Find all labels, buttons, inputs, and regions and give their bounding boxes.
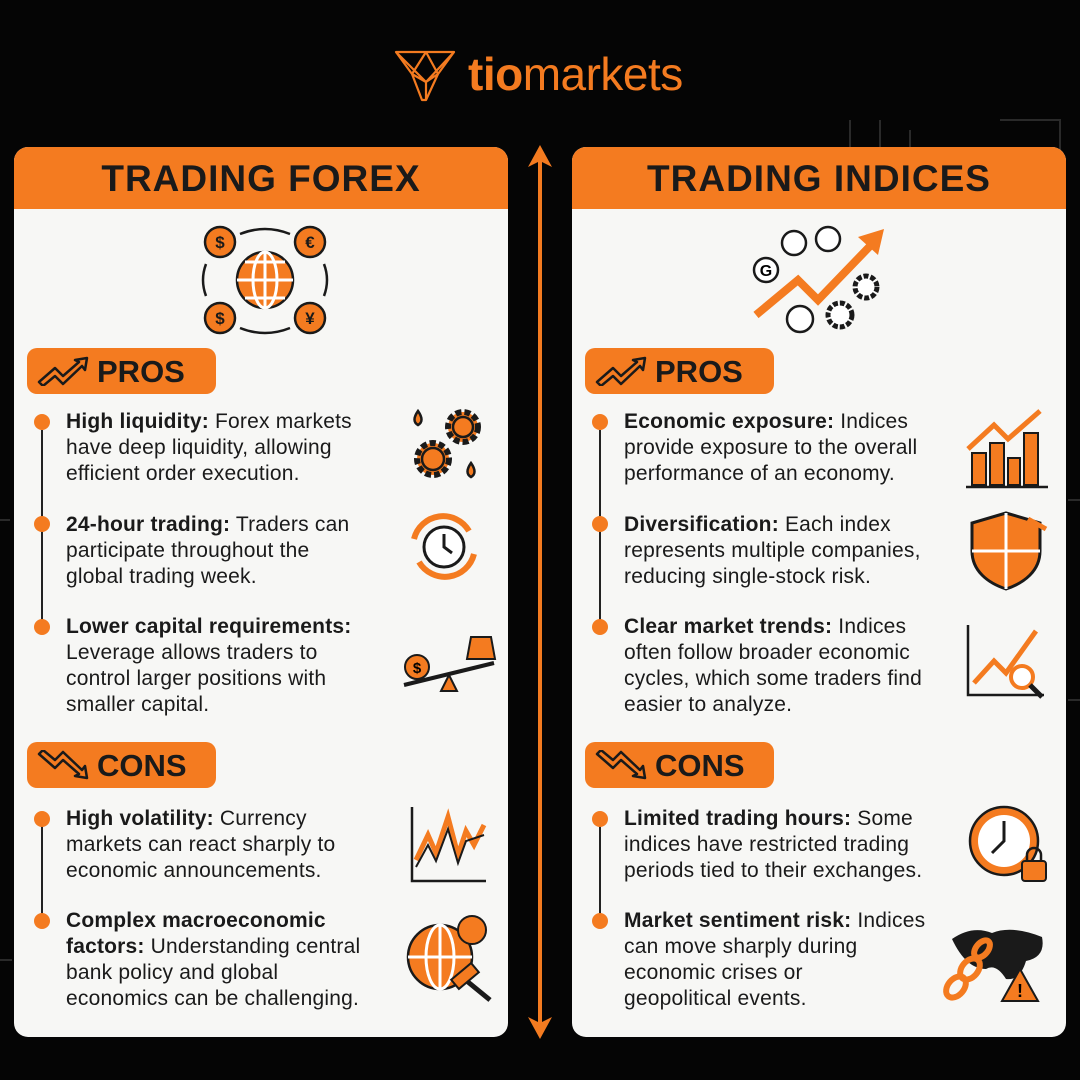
icon: trend magnifier: [966, 625, 1044, 699]
icon: gears and drops: [413, 409, 481, 478]
icon: globe currency: $: [215, 233, 225, 252]
logo: tiomarkets: [468, 48, 683, 100]
pros badge: PROS: [655, 354, 743, 389]
con item: limited trading hours: [624, 807, 922, 882]
con item: high volatility: economic announcements.: [66, 859, 322, 882]
cons badge: CONS: [97, 748, 187, 783]
panel: trading forex: [14, 147, 508, 1037]
icon: clock with lock: [968, 806, 1047, 882]
con item: complex macroeconomic factors: Complex macroeconomic: [66, 909, 326, 932]
icon: trend with company logos: [752, 226, 884, 334]
pro item: 24-hour trading: global trading week.: [66, 565, 257, 588]
icon: globe currency: €: [305, 233, 315, 252]
con item: limited trading hours: indices have restricted trading: [624, 833, 909, 856]
pros badge: PROS: [97, 354, 185, 389]
pro item: clear market trends: Clear market trends: Indices: [624, 615, 906, 638]
icon: trend with company logos: G: [760, 263, 772, 280]
pro item: 24-hour trading: 24-hour trading: Traders can: [66, 513, 349, 536]
pro item: lower capital requirements: [66, 615, 351, 716]
center double arrow: [528, 145, 552, 1039]
con item: market sentiment risk: can move sharply during: [624, 935, 857, 958]
icon: seesaw: $: [413, 660, 422, 677]
icon: world map chain warning: [943, 930, 1043, 1002]
pro item: economic exposure: [624, 410, 917, 485]
con item: complex macroeconomic factors: economics can be challenging.: [66, 987, 359, 1010]
pros badge: [27, 348, 216, 394]
icon: clock cycle: [411, 513, 477, 580]
pro item: clear market trends: easier to analyze.: [624, 693, 792, 716]
con item: high volatility: markets can react sharply to: [66, 833, 335, 856]
icon: volatile chart: [410, 807, 486, 882]
icon: shield puzzle: [970, 511, 1048, 591]
icon: globe currency: $: [215, 309, 225, 328]
con item: high volatility: High volatility: Currency: [66, 807, 307, 830]
pros badge: [585, 348, 774, 394]
pro item: lower capital requirements: smaller capital.: [66, 693, 209, 716]
con item: market sentiment risk: economic crises or: [624, 961, 803, 984]
con item: high volatility: [66, 807, 335, 882]
icon: globe currency: ¥: [305, 309, 315, 328]
pro item: diversification: Diversification: Each index: [624, 513, 891, 536]
con item: market sentiment risk: [624, 909, 925, 1010]
pro item: diversification: [624, 513, 921, 588]
cons badge: [585, 742, 774, 788]
pro item: 24-hour trading: participate throughout the: [66, 539, 309, 562]
icon: city growth chart: [966, 409, 1048, 488]
con item: limited trading hours: periods tied to their exchanges.: [624, 859, 922, 882]
con item: complex macroeconomic factors: factors: Understanding central: [66, 935, 360, 958]
con item: market sentiment risk: geopolitical events.: [624, 987, 807, 1010]
con item: market sentiment risk: Market sentiment risk: Indices: [624, 909, 925, 932]
pro item: high liquidity: High liquidity: Forex markets: [66, 410, 352, 433]
icon: globe and gavel: [406, 915, 492, 1002]
icon: world map chain warning: !: [1017, 981, 1023, 1001]
heading: trading forex: TRADING FOREX: [101, 158, 421, 199]
icon: seesaw: [404, 636, 496, 692]
heading: trading forex: [14, 147, 508, 209]
pro item: clear market trends: [624, 615, 922, 716]
pro item: lower capital requirements: Lower capital requirements:: [66, 615, 351, 638]
heading: trading indices: TRADING INDICES: [647, 158, 991, 199]
con item: complex macroeconomic factors: bank policy and global: [66, 961, 278, 984]
heading: trading indices: [572, 147, 1066, 209]
pro item: lower capital requirements: Leverage allows traders to: [66, 641, 318, 664]
panel: trading indices: [572, 147, 1066, 1037]
pro item: 24-hour trading: [66, 513, 349, 588]
cons badge: [27, 742, 216, 788]
pro item: diversification: reducing single-stock risk.: [624, 565, 871, 588]
con item: limited trading hours: Limited trading hours: Some: [624, 807, 913, 830]
pro item: economic exposure: Economic exposure: Indices: [624, 410, 908, 433]
cons badge: CONS: [655, 748, 745, 783]
pro item: clear market trends: often follow broader economic: [624, 641, 910, 664]
pro item: clear market trends: cycles, which some traders find: [624, 667, 922, 690]
pro item: high liquidity: [66, 410, 352, 485]
pro item: lower capital requirements: control larger positions with: [66, 667, 326, 690]
pro item: diversification: represents multiple companies,: [624, 539, 921, 562]
con item: complex macroeconomic factors: [66, 909, 360, 1010]
icon: globe currency: [202, 226, 328, 334]
pro item: high liquidity: have deep liquidity, allowing: [66, 436, 332, 459]
pro item: high liquidity: efficient order execution.: [66, 462, 300, 485]
pro item: economic exposure: performance of an economy.: [624, 462, 895, 485]
pro item: economic exposure: provide exposure to the overall: [624, 436, 917, 459]
